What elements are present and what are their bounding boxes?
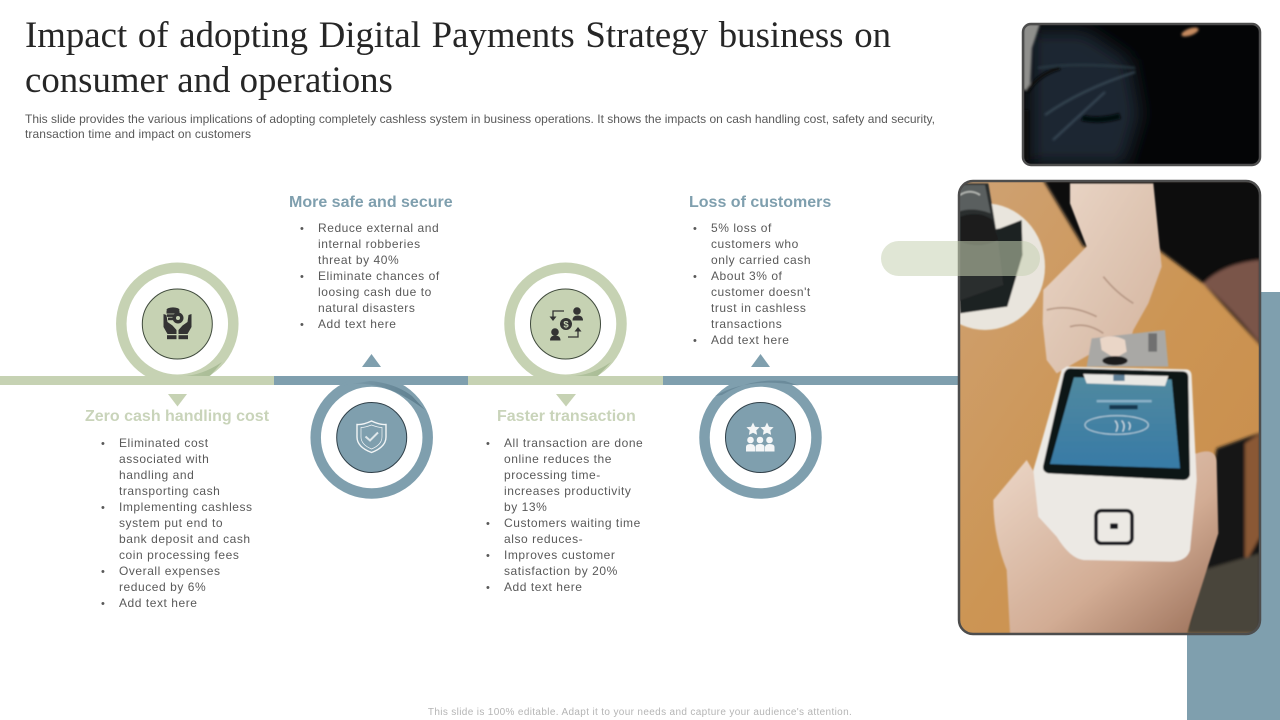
bullet list: transporting cash bbox=[119, 484, 220, 498]
upper hand bbox=[1043, 183, 1162, 373]
description: This slide provides the various implications of adopting completely cashless system in business operations. It shows the impacts on cash handling cost, safety and security, bbox=[25, 112, 935, 126]
bullet list bbox=[300, 221, 440, 331]
timeline bar bbox=[0, 376, 959, 385]
panel: loss of customers bbox=[689, 194, 831, 347]
bullet list: natural disasters bbox=[318, 301, 415, 315]
bullet list: coin processing fees bbox=[119, 548, 239, 562]
icon: shield with check bbox=[357, 421, 386, 452]
bullet list: also reduces- bbox=[504, 532, 583, 546]
bullet list: handling and bbox=[119, 468, 194, 482]
translucent pill bbox=[881, 241, 1040, 276]
bullet list: 5% loss of bbox=[711, 221, 772, 235]
bullet list: Implementing cashless bbox=[119, 500, 253, 514]
bullet list: by 13% bbox=[504, 500, 547, 514]
icon: rated customers bbox=[746, 422, 774, 452]
bullet list: processing time- bbox=[504, 468, 601, 482]
bullet list: increases productivity bbox=[504, 484, 631, 498]
heading: Zero cash handling cost bbox=[85, 408, 269, 425]
bullet list: only carried cash bbox=[711, 253, 811, 267]
bullet list: Overall expenses bbox=[119, 564, 221, 578]
bullet list: associated with bbox=[119, 452, 209, 466]
lower hand bbox=[993, 451, 1218, 633]
bullet list: All transaction are done bbox=[504, 436, 643, 450]
bullet list: threat by 40% bbox=[318, 253, 399, 267]
step 1 ring with icon bbox=[120, 268, 233, 380]
terminal bbox=[1033, 367, 1197, 562]
title: Impact of adopting Digital Payments Strategy business on bbox=[25, 14, 891, 55]
arrow: step 4 up bbox=[751, 354, 770, 367]
bullet list: Reduce external and bbox=[318, 221, 439, 235]
arrow: step 1 down bbox=[168, 394, 187, 406]
bullet list: Improves customer bbox=[504, 548, 615, 562]
bullet list: customers who bbox=[711, 237, 799, 251]
bullet list: reduced by 6% bbox=[119, 580, 206, 594]
icon: hands holding coins bbox=[164, 307, 192, 339]
bullet list bbox=[693, 221, 811, 347]
card bbox=[1087, 330, 1168, 367]
step 4 ring with icon bbox=[704, 381, 816, 494]
heading: More safe and secure bbox=[289, 194, 453, 211]
bullet list: online reduces the bbox=[504, 452, 612, 466]
bullet list: Add text here bbox=[504, 580, 583, 594]
bullet list bbox=[486, 436, 643, 594]
title bbox=[25, 14, 891, 100]
title: consumer and operations bbox=[25, 59, 393, 100]
arrow: step 3 down bbox=[556, 394, 576, 406]
heading: Faster transaction bbox=[497, 408, 636, 425]
bullet list: Eliminated cost bbox=[119, 436, 209, 450]
bullet list: system put end to bbox=[119, 516, 223, 530]
bullet list: bank deposit and cash bbox=[119, 532, 251, 546]
panel: faster transaction bbox=[486, 408, 643, 594]
panel: more safe and secure bbox=[289, 194, 453, 331]
icon: people exchanging money: $ bbox=[563, 320, 569, 330]
description bbox=[25, 112, 935, 141]
bullet list: Add text here bbox=[318, 317, 397, 331]
decorative blue panel bbox=[1187, 292, 1280, 720]
bullet list: satisfaction by 20% bbox=[504, 564, 618, 578]
heading: Loss of customers bbox=[689, 194, 831, 211]
step 3 ring with icon bbox=[505, 268, 622, 380]
main photo: card payment at terminal bbox=[958, 180, 1262, 636]
bullet list bbox=[101, 436, 253, 610]
bullet list: trust in cashless bbox=[711, 301, 806, 315]
bullet list: customer doesn't bbox=[711, 285, 811, 299]
bullet list: transactions bbox=[711, 317, 782, 331]
bullet list: loosing cash due to bbox=[318, 285, 432, 299]
description: transaction time and impact on customers bbox=[25, 127, 251, 141]
bullet list: Add text here bbox=[711, 333, 790, 347]
bullet list: Eliminate chances of bbox=[318, 269, 440, 283]
bullet list: About 3% of bbox=[711, 269, 782, 283]
bullet list: internal robberies bbox=[318, 237, 421, 251]
panel: zero cash handling cost bbox=[85, 408, 269, 610]
step 2 ring with icon bbox=[316, 381, 428, 494]
bullet list: Add text here bbox=[119, 596, 198, 610]
arrow: step 2 up bbox=[362, 354, 381, 367]
footer note: This slide is 100% editable. Adapt it to your needs and capture your audience's attention. bbox=[428, 707, 852, 718]
bullet list: Customers waiting time bbox=[504, 516, 641, 530]
top right photo bbox=[1023, 24, 1260, 165]
